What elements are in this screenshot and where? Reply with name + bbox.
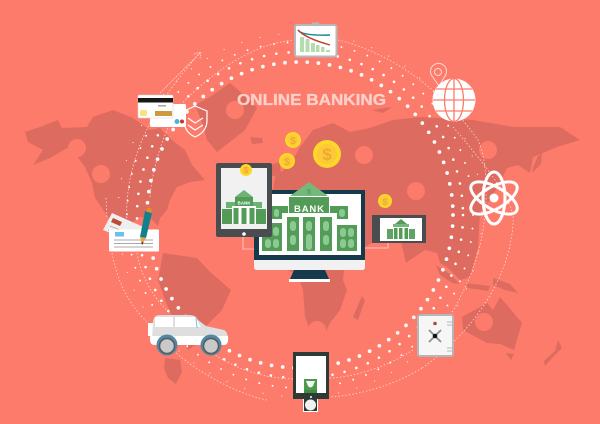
icon: safe	[418, 315, 453, 356]
icon: mobile device with cash	[293, 352, 329, 412]
icon: atom	[466, 172, 522, 224]
landscape tablet with bank	[372, 215, 426, 243]
dashed orbit arcs	[106, 40, 513, 400]
icon: globe with location pin	[430, 63, 476, 122]
portrait tablet with bank	[216, 163, 272, 237]
dotted ring bands	[118, 33, 482, 397]
icon: gold coins	[279, 132, 392, 208]
bank building	[262, 182, 357, 251]
icon: gold coins: $	[290, 136, 296, 147]
icon: gold coins: $	[382, 197, 388, 207]
icon: car	[148, 315, 228, 356]
icon: gold coins: $	[284, 157, 290, 168]
icon: chart board	[295, 22, 336, 56]
portrait tablet with bank: BANK	[238, 200, 251, 206]
map highlight circles	[68, 101, 497, 339]
desktop monitor with bank	[254, 182, 365, 282]
connector lines	[243, 237, 388, 249]
icon: gold coins: $	[322, 145, 332, 164]
icon: bank cards and shield	[138, 95, 207, 137]
icon: cheque and pen	[103, 208, 159, 252]
world map	[25, 83, 580, 384]
bank building: $	[307, 189, 311, 196]
portrait tablet with bank: $	[244, 166, 249, 175]
title: ONLINE BANKING	[237, 92, 386, 109]
bank building: BANK	[294, 204, 324, 215]
